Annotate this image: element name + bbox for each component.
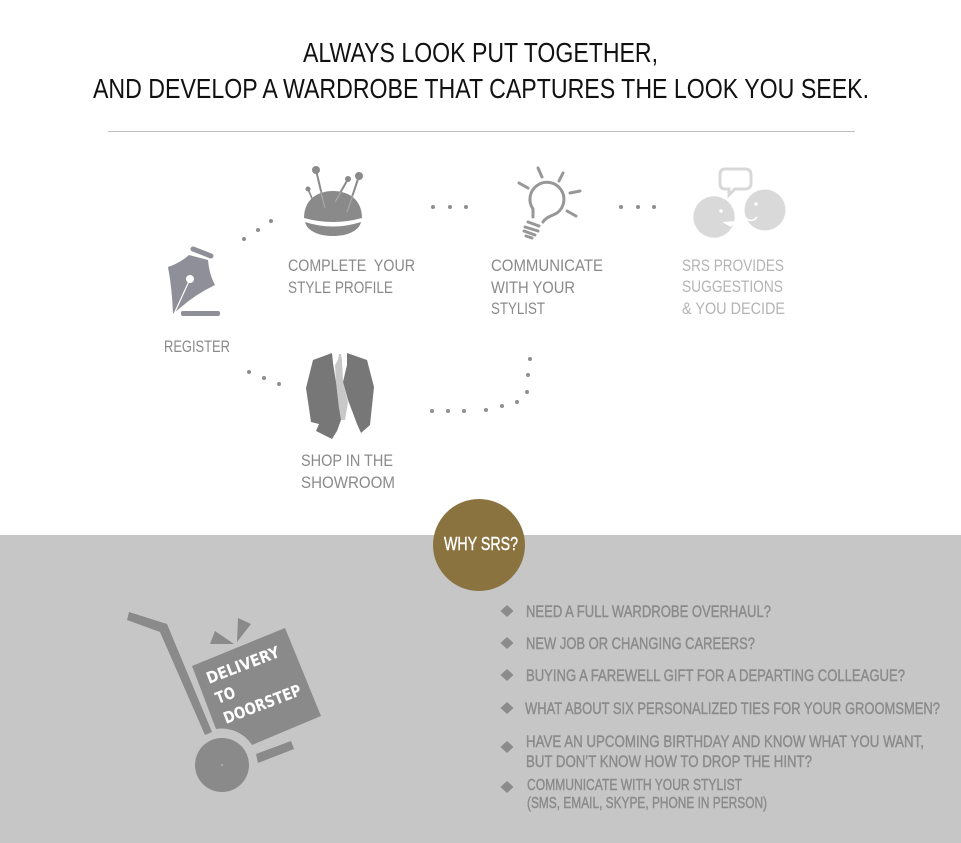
badge: why srs <box>433 499 525 591</box>
label: communicate with your stylist: STYLIST <box>491 300 545 318</box>
label: srs provides suggestions and you decide: SRS PROVIDES <box>682 257 784 275</box>
text: delivery to doorstep: DELIVERY <box>204 642 283 688</box>
list text: BUT DON’T KNOW HOW TO DROP THE HINT? <box>526 752 812 771</box>
icon: pincushion <box>304 166 363 236</box>
list text: COMMUNICATE WITH YOUR STYLIST <box>527 777 742 794</box>
text: delivery to doorstep: DOORSTEP <box>221 681 304 728</box>
icon: jacket <box>306 353 374 439</box>
icon: fountain pen nib <box>168 249 220 316</box>
list text <box>525 602 940 812</box>
list text: (SMS, EMAIL, SKYPE, PHONE IN PERSON) <box>527 795 767 812</box>
icon: talking faces <box>693 169 786 238</box>
title: ALWAYS LOOK PUT TOGETHER, <box>303 37 658 68</box>
text: delivery to doorstep: TO <box>213 683 238 708</box>
step: complete style profile <box>288 166 415 297</box>
list: why srs reasons <box>500 602 940 812</box>
title <box>93 37 869 104</box>
label: shop in the showroom: SHOP IN THE <box>301 452 393 470</box>
list text: NEED A FULL WARDROBE OVERHAUL? <box>526 602 771 621</box>
dots: profile to communicate <box>431 205 468 209</box>
bullet diamonds <box>500 605 514 793</box>
panel: why srs <box>0 499 961 843</box>
panel: process steps <box>164 166 786 492</box>
step: srs provides suggestions <box>682 169 786 318</box>
label: srs provides suggestions and you decide: SUGGESTIONS <box>682 278 783 296</box>
label: communicate with your stylist <box>491 257 603 318</box>
icon: delivery hand truck <box>127 612 321 792</box>
step: communicate with stylist <box>491 168 603 318</box>
label: register: REGISTER <box>164 338 230 356</box>
badge: why srs: WHY SRS? <box>444 534 518 554</box>
label: complete your style profile <box>288 257 415 297</box>
dots: register to profile <box>242 219 273 241</box>
label: srs provides suggestions and you decide <box>682 257 785 318</box>
dots: showroom to communicate <box>430 357 532 413</box>
list text: NEW JOB OR CHANGING CAREERS? <box>526 634 755 653</box>
dots: register to showroom <box>247 370 281 386</box>
icon: light bulb <box>519 168 580 238</box>
step: shop in the showroom <box>301 353 395 492</box>
step: register <box>164 249 230 356</box>
label: complete your style profile: STYLE PROFILE <box>288 279 393 297</box>
label: complete your style profile: COMPLETE YOUR <box>288 257 415 275</box>
label: shop in the showroom: SHOWROOM <box>301 474 395 492</box>
label: communicate with your stylist: WITH YOUR <box>491 279 575 297</box>
text: delivery to doorstep <box>204 642 304 728</box>
dots: communicate to suggestions <box>619 205 656 209</box>
label: srs provides suggestions and you decide: & YOU DECIDE <box>682 300 785 318</box>
label: communicate with your stylist: COMMUNICATE <box>491 257 603 275</box>
label: shop in the showroom <box>301 452 395 492</box>
